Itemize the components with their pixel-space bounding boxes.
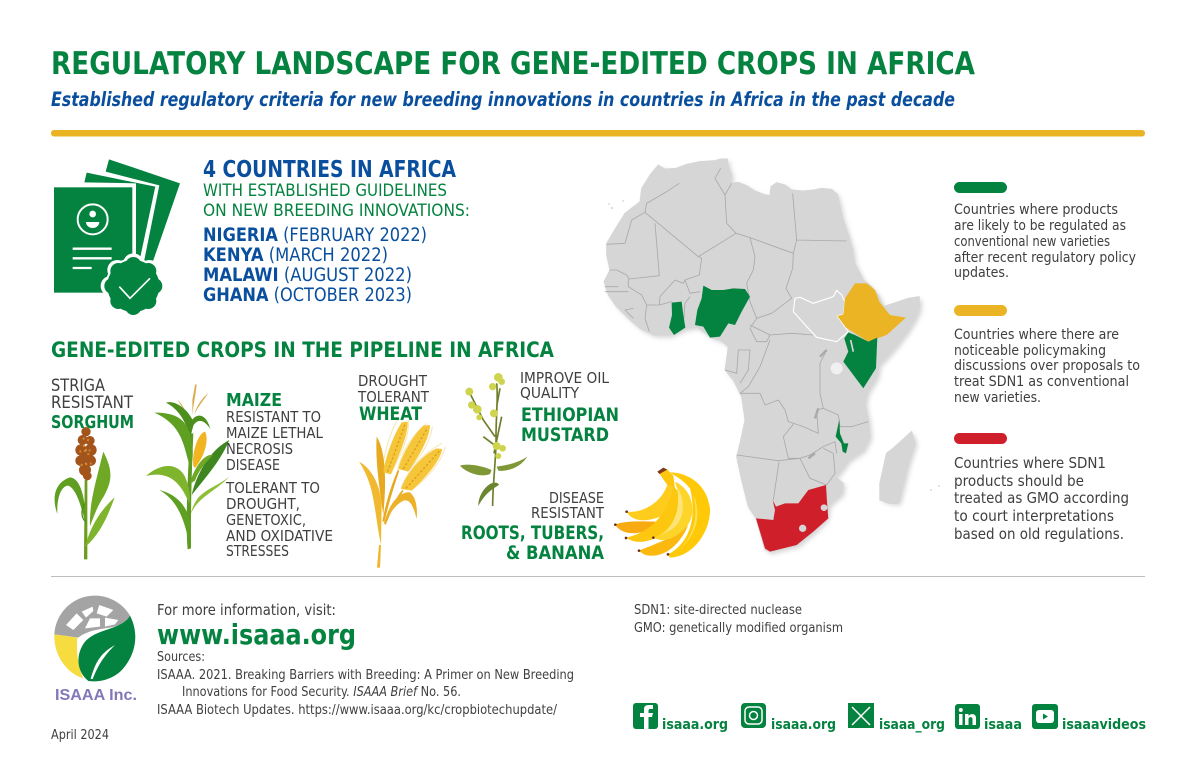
sources: ISAAA Biotech Updates. https://www.isaaa.org/kc/cropbiotechupdate/ [157, 702, 557, 718]
logo: ISAAA Inc.: ISAAA Inc. [55, 687, 137, 704]
wheat label: DROUGHT [358, 372, 427, 390]
sorghum label [51, 376, 134, 433]
mustard label: QUALITY [520, 384, 579, 402]
maize label: GENETOXIC, [226, 511, 306, 529]
legend: conventional: are likely to be regulated as [954, 218, 1126, 234]
sorghum label: SORGHUM [51, 412, 134, 433]
maize label: NECROSIS [226, 440, 293, 458]
maize label: DISEASE [226, 456, 280, 474]
maize label: MAIZE [226, 390, 282, 411]
maize label: STRESSES [226, 542, 289, 560]
social: facebook: isaaa.org [662, 717, 728, 733]
legend: conventional: conventional new varieties [954, 234, 1110, 250]
social: youtube: isaaavideos [1062, 717, 1146, 733]
roots, tubers and banana label: ROOTS, TUBERS, [461, 523, 604, 544]
legend: GMO: Countries where SDN1 [954, 455, 1106, 472]
legend: GMO: products should be [954, 473, 1084, 490]
illustration: ethiopian mustard [460, 373, 527, 506]
roots, tubers and banana label: & BANANA [506, 543, 605, 564]
country list [203, 225, 427, 306]
wheat label: TOLERANT [357, 388, 429, 406]
social: X [848, 703, 945, 733]
legend: conventional [954, 182, 1136, 281]
legend: policy discussions: new varieties. [954, 390, 1041, 406]
mustard label [520, 369, 619, 446]
mustard label: MUSTARD [521, 425, 609, 446]
illustration: sorghum [55, 427, 115, 559]
guidelines text: WITH ESTABLISHED GUIDELINES [203, 181, 447, 200]
illustration: bananas [614, 468, 710, 558]
title: REGULATORY LANDSCAPE FOR GENE-EDITED CROPS IN AFRICA [51, 46, 976, 82]
South Sudan [793, 290, 848, 342]
abbreviations: SDN1: site-directed nuclease [634, 602, 802, 618]
wheat label [357, 372, 429, 425]
legend: policy discussions: discussions over proposals to [954, 358, 1140, 374]
logo: ISAAA Inc. [54, 596, 137, 704]
abbreviations: GMO: genetically modified organism [634, 620, 843, 636]
Ethiopia [837, 283, 906, 342]
legend: GMO: treated as GMO according [954, 490, 1129, 507]
maize label: TOLERANT TO [225, 479, 320, 497]
legend: policy discussions [954, 305, 1140, 406]
sources: Sources: [157, 649, 205, 665]
pipeline heading: GENE-EDITED CROPS IN THE PIPELINE IN AFRICA [51, 338, 554, 363]
legend: GMO [954, 433, 1129, 543]
country list: MALAWI (AUGUST 2022) [203, 265, 412, 286]
legend: policy discussions: noticeable policymaking [954, 343, 1106, 359]
islands [608, 200, 940, 491]
sorghum label: RESISTANT [51, 393, 134, 412]
social: instagram [741, 703, 836, 733]
guidelines text [203, 181, 470, 220]
Nigeria [695, 286, 750, 338]
maize label: DROUGHT, [226, 495, 300, 513]
sorghum label: STRIGA [51, 376, 106, 395]
date: April 2024 [51, 727, 109, 743]
Malawi [836, 419, 848, 453]
legend: conventional: updates. [954, 265, 1009, 281]
social: linkedin: isaaa [984, 717, 1022, 733]
legend: GMO: to court interpretations [954, 508, 1114, 525]
abbreviations [634, 602, 843, 636]
maize label [225, 390, 333, 560]
South Africa [756, 485, 828, 552]
subtitle: Established regulatory criteria for new breeding innovations in countries in Africa in the past decade [51, 88, 955, 111]
roots, tubers and banana label: RESISTANT [531, 504, 604, 522]
illustration: wheat [359, 420, 446, 568]
icon: documents with approval badge [54, 159, 180, 319]
wheat label: WHEAT [359, 403, 422, 425]
maize label: AND OXIDATIVE [226, 527, 333, 545]
country list: KENYA (MARCH 2022) [203, 245, 388, 266]
social: instagram: isaaa.org [771, 717, 836, 733]
sources [157, 649, 574, 718]
Kenya [843, 332, 877, 388]
mustard label: ETHIOPIAN [521, 405, 619, 426]
country list: GHANA (OCTOBER 2023) [203, 285, 412, 306]
legend: GMO: based on old regulations. [954, 526, 1124, 543]
maize label: MAIZE LETHAL [226, 424, 323, 442]
legend: policy discussions: treat SDN1 as conventional [954, 374, 1129, 390]
sources: ISAAA. 2021. Breaking Barriers with Breeding: A Primer on New Breeding [157, 667, 574, 683]
roots, tubers and banana label: DISEASE [549, 489, 604, 507]
social: facebook [633, 703, 728, 733]
social: youtube [1032, 704, 1146, 733]
website: www.isaaa.org [157, 618, 356, 651]
countries heading: 4 COUNTRIES IN AFRICA [203, 157, 456, 183]
illustration: maize [146, 384, 229, 549]
country list: NIGERIA (FEBRUARY 2022) [203, 225, 427, 246]
mustard label: IMPROVE OIL [520, 369, 609, 387]
sources: Innovations for Food Security. ISAAA Brief No. 56. [182, 684, 461, 700]
Ghana [669, 302, 685, 335]
social: X: isaaa_org [879, 717, 945, 733]
legend: policy discussions: Countries where there are [954, 327, 1119, 343]
more information: For more information, visit: [157, 601, 336, 619]
map of Africa [604, 159, 940, 554]
roots, tubers and banana label [461, 489, 605, 564]
social: linkedin [955, 704, 1022, 733]
legend: conventional: after recent regulatory policy [954, 250, 1136, 266]
guidelines text: ON NEW BREEDING INNOVATIONS: [203, 201, 470, 220]
maize label: RESISTANT TO [226, 408, 321, 426]
legend: conventional: Countries where products [954, 202, 1118, 218]
